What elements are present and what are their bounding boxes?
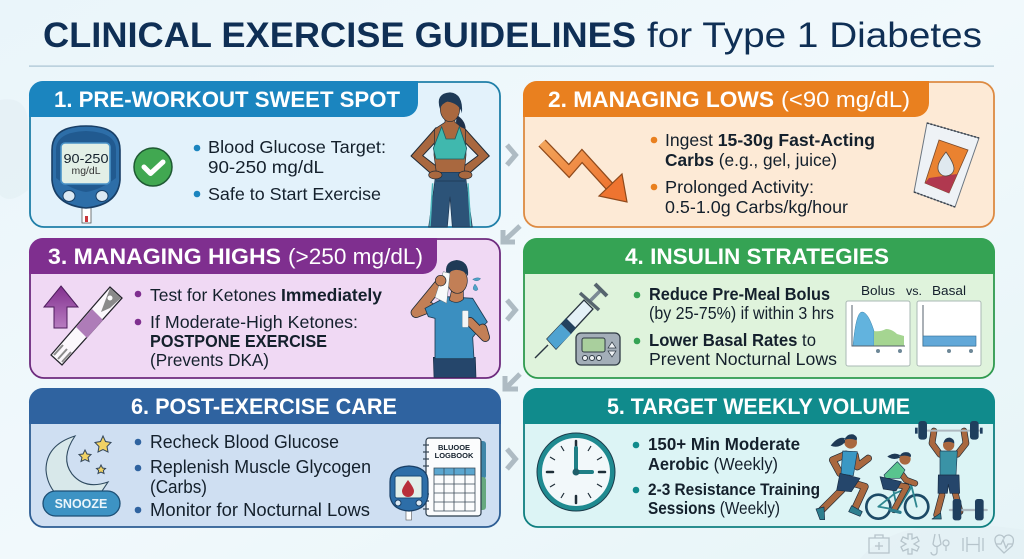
icon: snooze button: SNOOZE — [55, 497, 107, 511]
bullets: Reduce Pre-Meal Bolus — [649, 284, 830, 304]
bullets: Test for Ketones Immediately — [150, 285, 382, 305]
icon: insulin pump — [576, 333, 620, 365]
icon: gel packet — [914, 123, 979, 207]
icon: glucose meter — [52, 126, 120, 223]
bullets: Replenish Muscle Glycogen — [150, 457, 371, 477]
arrow: step 4 to 6 — [505, 374, 520, 389]
bullets: (Carbs) — [150, 477, 207, 497]
bullets: POSTPONE EXERCISE — [150, 331, 327, 351]
bullets — [651, 130, 875, 217]
icon: dumbbell — [963, 537, 983, 552]
icon: athletes — [816, 421, 987, 520]
icon: stethoscope — [931, 534, 949, 555]
icon: syringe — [535, 284, 607, 358]
title: for Type 1 Diabetes — [647, 15, 982, 55]
icon: medical kit — [869, 535, 889, 553]
icon: logbook — [423, 438, 486, 516]
bullets: 0.5-1.0g Carbs/kg/hour — [665, 197, 848, 217]
icon: logbook: BLUOOE — [438, 443, 470, 452]
arrow: step 3 to 4 — [507, 300, 516, 320]
bullets: 90-250 mg/dL — [208, 157, 324, 177]
panel: 1 pre-workout sweet spot — [29, 81, 500, 227]
bullets — [633, 434, 820, 518]
cyclist — [866, 452, 928, 519]
icon: crescent moon and stars — [46, 436, 111, 494]
panel: 6 post-exercise care — [29, 388, 501, 527]
chart: bolus vs basal: Basal — [932, 284, 966, 298]
bullets: Recheck Blood Glucose — [150, 432, 339, 452]
bullets: Safe to Start Exercise — [208, 184, 381, 204]
heading: 2. MANAGING LOWS — [548, 87, 774, 112]
heading: (<90 mg/dL) — [781, 87, 910, 112]
bullets: Aerobic (Weekly) — [648, 454, 778, 474]
panel: 4 insulin strategies — [523, 238, 995, 378]
title: CLINICAL EXERCISE GUIDELINES — [43, 15, 636, 55]
bullets — [135, 285, 382, 370]
arrow: step 1 to 2 — [507, 145, 516, 165]
panel: 5 target weekly volume — [523, 388, 995, 527]
heading: 4. INSULIN STRATEGIES — [625, 244, 889, 269]
panel: 2 managing lows — [523, 81, 994, 227]
icon: falling arrow — [542, 143, 627, 202]
panel: 3 managing highs — [29, 238, 500, 378]
heading — [548, 87, 910, 112]
chart: bolus vs basal: Bolus — [861, 284, 895, 298]
bullets — [634, 284, 837, 369]
heading: 3. MANAGING HIGHS — [48, 244, 281, 269]
icon: standing woman — [411, 92, 489, 227]
bullets: Monitor for Nocturnal Lows — [150, 500, 370, 520]
heading: 6. POST-EXERCISE CARE — [131, 394, 397, 419]
bullets: (Prevents DKA) — [150, 350, 269, 370]
icon: sweating man — [416, 260, 487, 377]
heading — [48, 244, 423, 269]
bullets — [194, 137, 386, 204]
bullets: If Moderate-High Ketones: — [150, 312, 358, 332]
bullets: Prolonged Activity: — [665, 177, 814, 197]
bullets: Sessions (Weekly) — [648, 498, 780, 518]
icon: small glucose meter — [390, 466, 428, 520]
icon: green check — [134, 148, 172, 186]
arrow: step 2 to 3 — [503, 226, 520, 242]
icon: ketone strip — [51, 287, 122, 365]
icon: glucose meter: mg/dL — [72, 166, 101, 177]
icon: clock — [537, 433, 615, 511]
bullets: (by 25-75%) if within 3 hrs — [649, 303, 834, 323]
bullets: 150+ Min Moderate — [648, 434, 800, 454]
icon: snooze button — [43, 491, 120, 516]
runner — [816, 434, 868, 520]
lifter — [915, 421, 987, 520]
icon: glucose meter: 90-250 — [64, 151, 108, 166]
bullets: Blood Glucose Target: — [208, 137, 386, 157]
icon: star of life — [901, 534, 919, 554]
chart: bolus vs basal — [846, 284, 981, 366]
arrow: step 5 to 6 — [507, 449, 516, 469]
bullets — [135, 432, 371, 520]
icon: up arrow — [44, 286, 78, 328]
heading: (>250 mg/dL) — [288, 244, 423, 269]
heading: 5. TARGET WEEKLY VOLUME — [607, 394, 910, 419]
title — [43, 15, 982, 55]
bullets: 2-3 Resistance Training — [648, 481, 820, 499]
icon: logbook: LOGBOOK — [435, 451, 474, 460]
icon: heart pulse — [995, 535, 1013, 553]
bullets: Lower Basal Rates to — [649, 330, 816, 350]
footer icons — [869, 534, 1013, 555]
bullets: Prevent Nocturnal Lows — [649, 349, 837, 369]
chart: bolus vs basal: vs. — [906, 284, 922, 298]
bullets: Carbs (e.g., gel, juice) — [665, 150, 837, 170]
bullets: Ingest 15-30g Fast-Acting — [665, 130, 875, 150]
heading: 1. PRE-WORKOUT SWEET SPOT — [54, 87, 400, 112]
